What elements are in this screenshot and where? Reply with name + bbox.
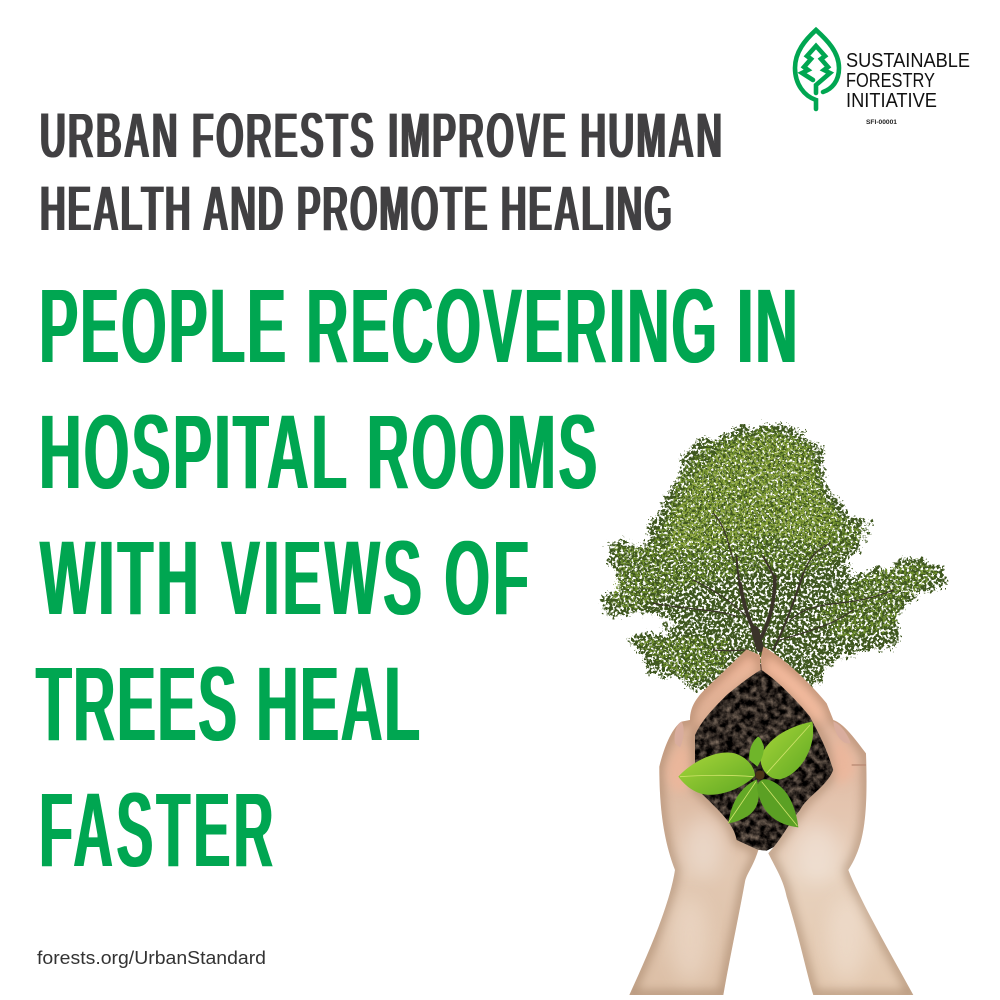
logo wordmark: SUSTAINABLE — [846, 49, 970, 72]
icon: green leaf with tree — [795, 30, 839, 109]
logo wordmark: SFI-00001 — [866, 119, 897, 126]
right thumbnail — [833, 722, 851, 744]
heading: urban forests — [40, 100, 722, 246]
tree trunk and branches — [653, 513, 893, 651]
main statement — [36, 266, 797, 891]
logo: Sustainable Forestry Initiative — [795, 30, 970, 126]
logo wordmark: INITIATIVE — [846, 89, 937, 112]
heading: urban forests: HEALTH AND PROMOTE HEALING — [40, 173, 672, 246]
seedling — [678, 722, 813, 827]
logo wordmark — [846, 49, 970, 126]
main statement: WITH VIEWS OF — [40, 518, 529, 639]
main statement: PEOPLE RECOVERING IN — [39, 266, 797, 387]
main statement: FASTER — [39, 770, 273, 891]
website url: forests.org/UrbanStandard — [37, 947, 266, 968]
illustration: tree — [603, 423, 945, 690]
logo wordmark: FORESTRY — [846, 69, 935, 92]
heading: urban forests: URBAN FORESTS IMPROVE HUMAN — [40, 100, 722, 173]
soil — [688, 663, 840, 851]
left thumbnail — [675, 722, 684, 747]
left hand — [629, 649, 761, 995]
right hand — [761, 647, 913, 995]
main statement: TREES HEAL — [36, 644, 420, 765]
tree foliage — [603, 423, 945, 690]
illustration: cupped hands with soil and seedling — [629, 647, 913, 995]
main statement: HOSPITAL ROOMS — [39, 392, 597, 513]
